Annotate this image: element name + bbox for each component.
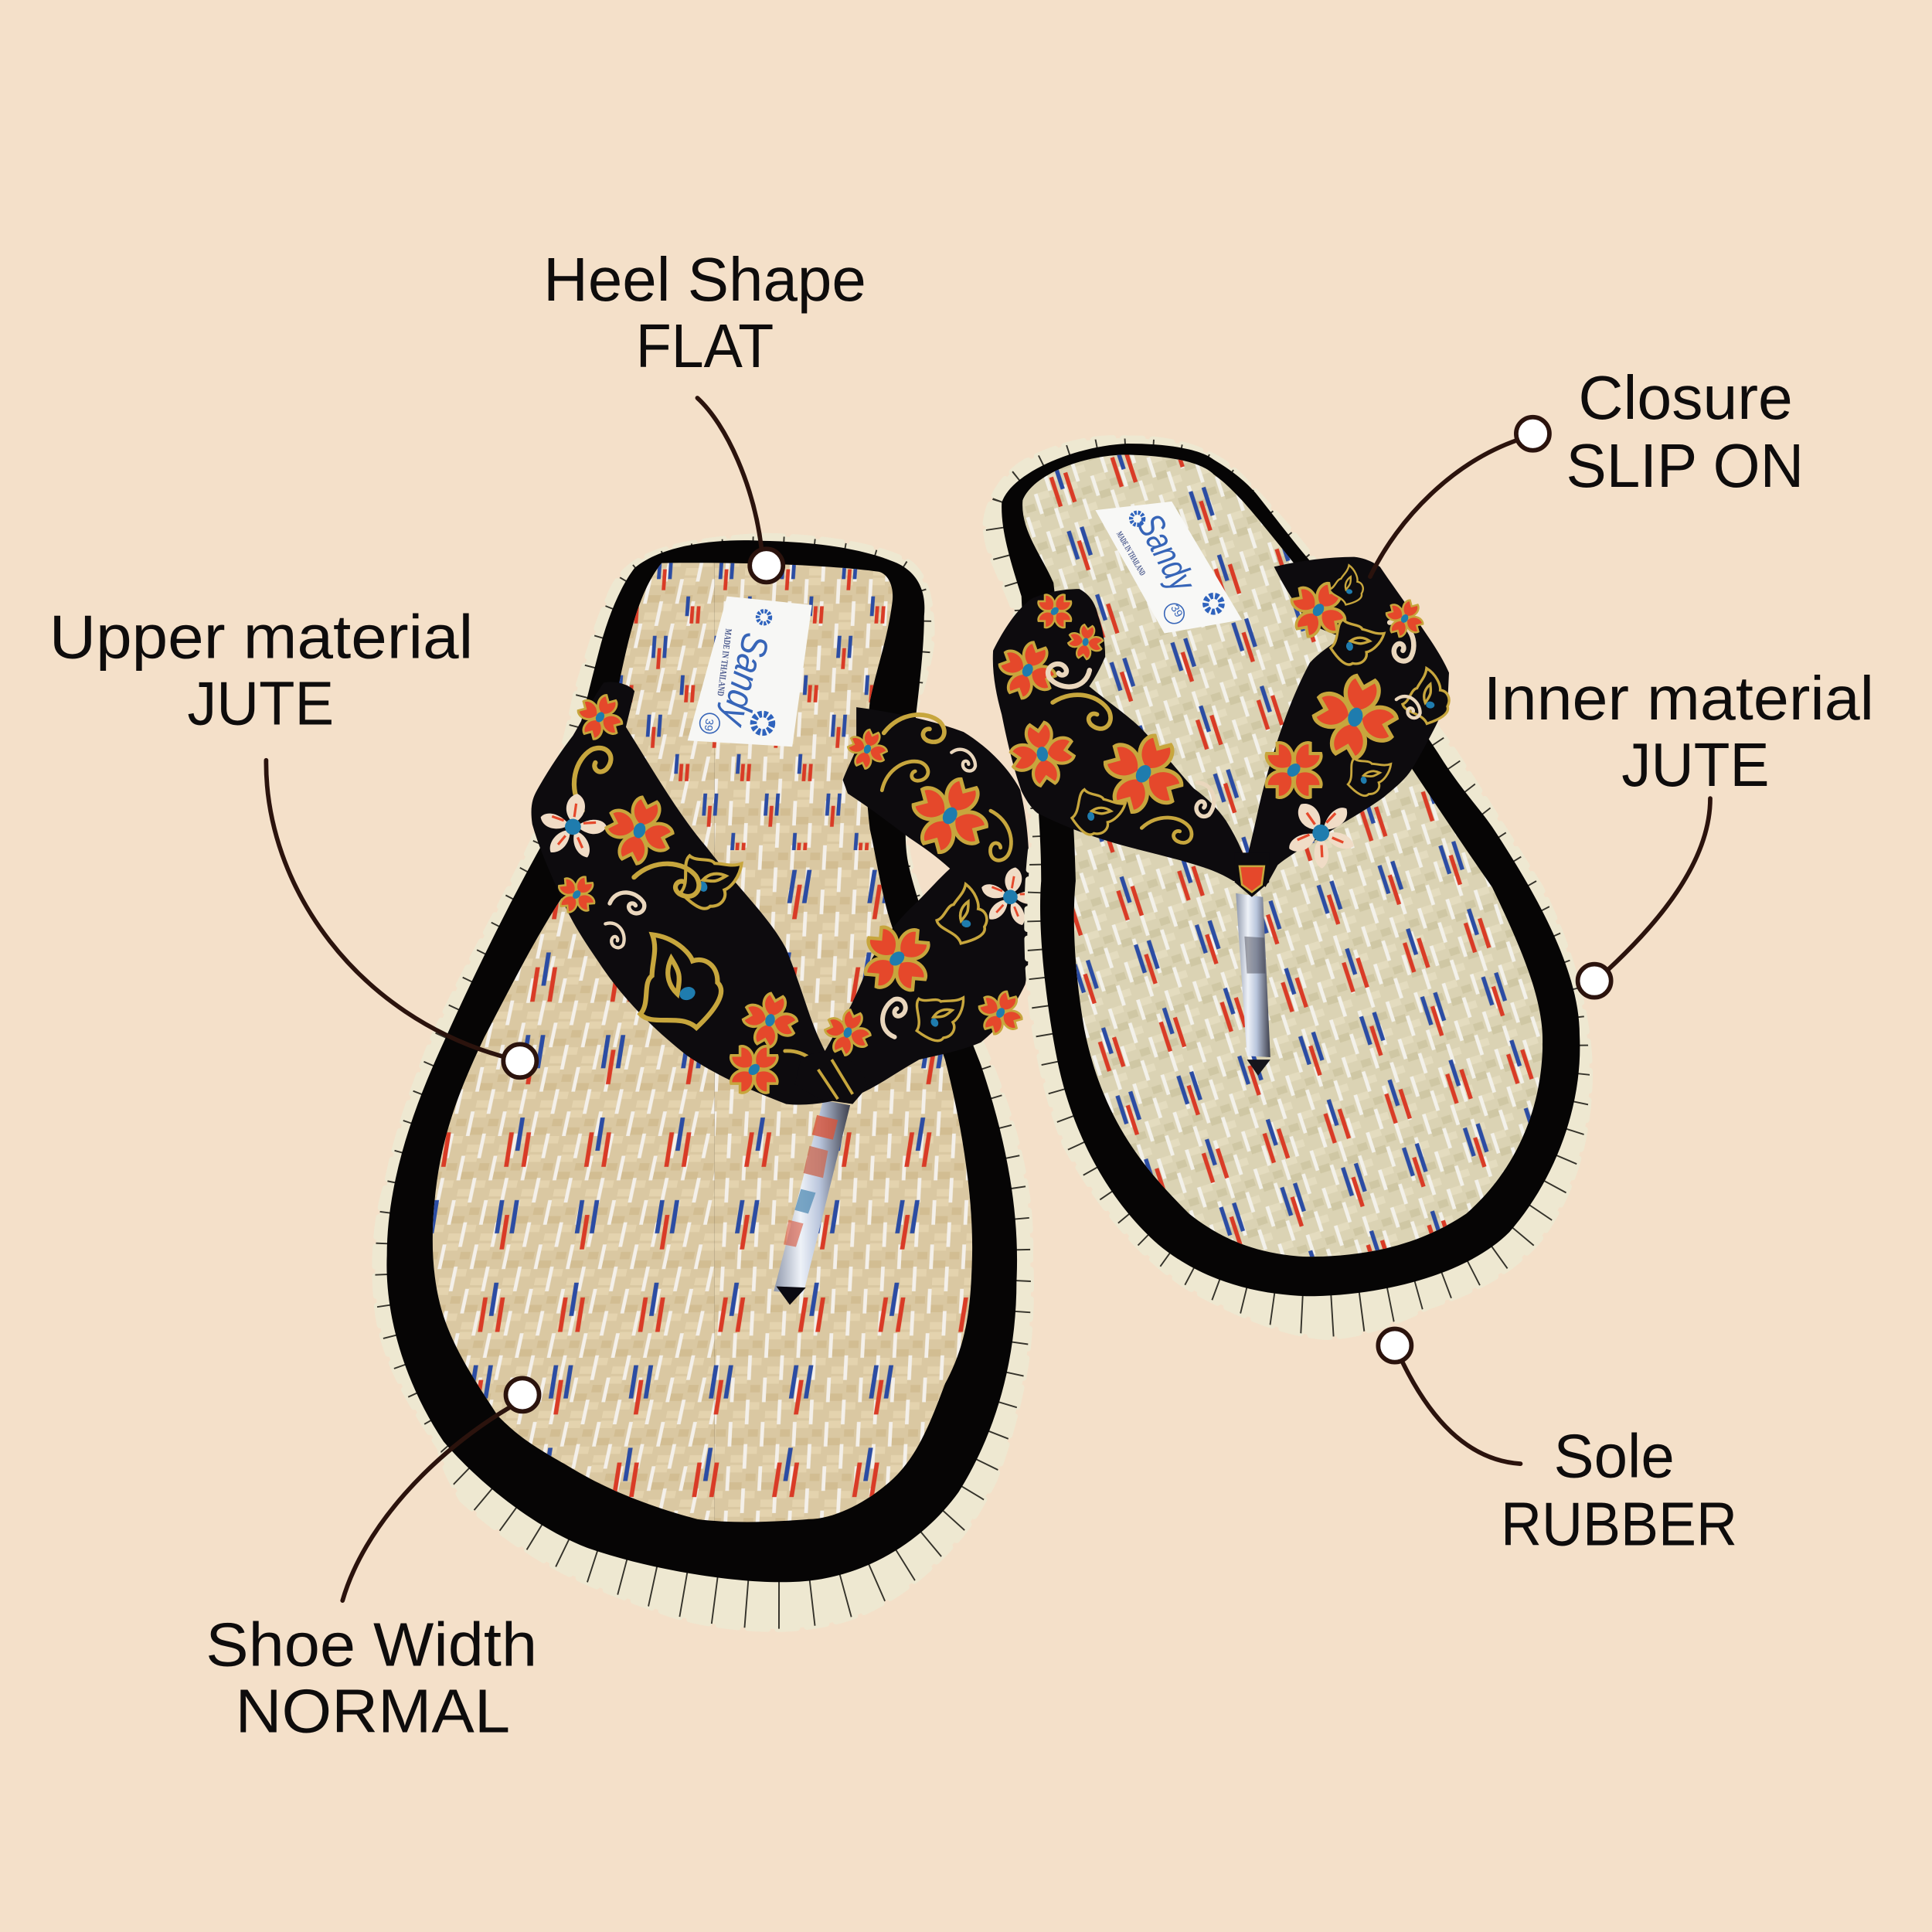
right sandal strap knot <box>1235 852 1269 897</box>
label: inner material <box>1484 664 1874 799</box>
right sandal <box>986 438 1590 1337</box>
right sandal woven jute footbed <box>1010 444 1565 1269</box>
leader line: shoe width <box>342 1407 510 1600</box>
right sandal rubber sole <box>986 438 1590 1337</box>
left sandal <box>375 536 1045 1629</box>
right sandal inner strap <box>1246 557 1451 887</box>
callout: sole <box>1378 1329 1737 1558</box>
left sandal strap knot <box>794 1053 867 1104</box>
right sandal brand tag: 39 <box>1168 603 1185 620</box>
leader line: upper material <box>266 760 505 1057</box>
leader line: heel shape <box>697 398 761 549</box>
left sandal rubber sole <box>375 536 1031 1629</box>
right sandal sole ridges <box>1002 444 1580 1296</box>
leader line: inner material <box>1607 798 1710 971</box>
right sandal outer strap <box>991 585 1252 881</box>
left sandal woven jute footbed <box>433 563 972 1522</box>
infographic canvas <box>54 256 1870 1733</box>
right sandal black velvet border <box>1002 444 1580 1296</box>
callout: inner material <box>1484 664 1874 998</box>
marker dot: upper material <box>503 1044 536 1077</box>
leader line: closure <box>1370 440 1518 577</box>
callout: closure <box>1370 363 1804 577</box>
label: heel shape <box>543 245 866 380</box>
left sandal sole ridges <box>386 540 1017 1582</box>
left sandal brand tag: 39 <box>702 718 715 732</box>
callout: shoe width <box>206 1378 539 1746</box>
label: shoe width: Shoe Width <box>206 1611 537 1679</box>
label: heel shape: FLAT <box>636 311 774 380</box>
left sandal outer strap <box>532 682 852 1107</box>
label: sole: Sole <box>1554 1422 1675 1491</box>
right sandal toe post <box>1236 893 1270 1076</box>
label: sole <box>1501 1422 1737 1558</box>
label: upper material: JUTE <box>187 669 334 738</box>
label: closure: Closure <box>1578 363 1793 432</box>
label: heel shape: Heel Shape <box>543 245 866 314</box>
left sandal black velvet border <box>386 540 1017 1582</box>
label: closure <box>1566 363 1804 500</box>
label: shoe width <box>206 1611 537 1746</box>
label: upper material <box>49 602 473 737</box>
left sandal brand tag: Sandy <box>713 629 777 732</box>
marker dot: closure <box>1516 417 1549 451</box>
callout: upper material <box>49 602 536 1077</box>
marker dot: shoe width <box>505 1378 539 1411</box>
label: inner material: Inner material <box>1484 664 1874 733</box>
marker dot: heel shape <box>750 549 783 582</box>
label: shoe width: NORMAL <box>236 1677 510 1746</box>
label: sole: RUBBER <box>1501 1489 1737 1558</box>
label: inner material: JUTE <box>1621 730 1770 799</box>
callout: heel shape <box>543 245 866 582</box>
leader line: sole <box>1402 1362 1520 1464</box>
label: upper material: Upper material <box>49 602 473 671</box>
label: closure: SLIP ON <box>1566 431 1804 500</box>
marker dot: sole <box>1378 1329 1411 1362</box>
right sandal brand tag: MADE IN THAILAND <box>1114 530 1147 577</box>
right sandal brand tag <box>1095 502 1242 634</box>
left sandal inner strap <box>813 707 1045 1095</box>
left sandal brand tag <box>688 597 812 747</box>
left sandal brand tag: MADE IN THAILAND <box>715 628 734 697</box>
left sandal toe post <box>774 1100 850 1304</box>
marker dot: inner material <box>1578 964 1611 998</box>
right sandal brand tag: Sandy <box>1128 507 1204 600</box>
